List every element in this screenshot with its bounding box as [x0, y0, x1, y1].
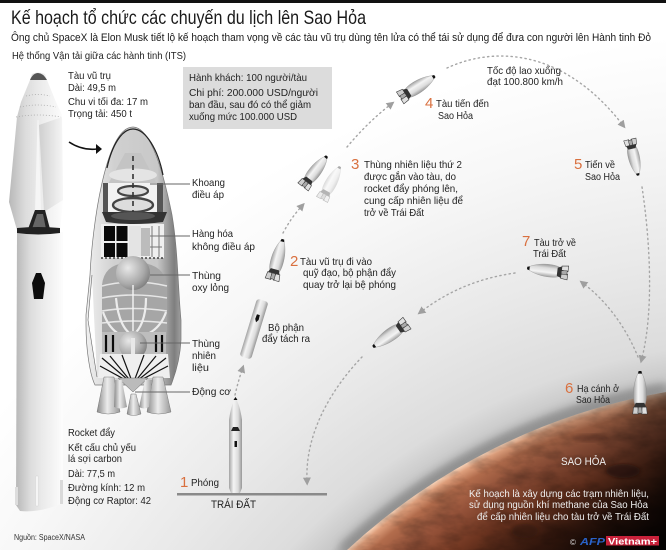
label: engine: Động cơ	[192, 386, 231, 398]
Mars note: sử dụng nguồn khí methane của Sao Hỏa	[469, 499, 648, 511]
step 3: được gắn vào tàu, do	[364, 170, 456, 183]
label: pressurized cabin: Khoang	[192, 177, 225, 189]
credit logos: AFP	[579, 537, 605, 548]
step 7: Trái Đất	[533, 248, 566, 260]
label: unpressurized cargo: không điều áp	[192, 241, 255, 253]
credit logos: ©	[570, 538, 576, 547]
liquid oxygen tank	[102, 256, 167, 345]
speed note	[487, 65, 563, 88]
step 3	[351, 156, 463, 219]
booster label: lá sợi carbon	[68, 453, 122, 465]
ship 3	[298, 152, 332, 191]
booster label: Động cơ Raptor: 42	[68, 495, 151, 507]
label: fuel tank	[192, 338, 220, 374]
step 4: Sao Hỏa	[438, 110, 473, 122]
separated booster	[239, 299, 269, 359]
step 2: 2	[290, 253, 298, 270]
label: Mars: SAO HỎA	[561, 455, 607, 468]
step 3: rocket đẩy phóng lên,	[364, 183, 458, 195]
pressurized cabin	[102, 153, 167, 224]
step 6: Sao Hỏa	[576, 394, 610, 406]
panel: passengers and cost: xuống mức 100.000 USD	[189, 111, 297, 123]
spaceship label	[68, 70, 148, 120]
engines	[97, 377, 171, 416]
ship returning	[369, 317, 411, 353]
step 5: 5	[574, 156, 582, 173]
panel: passengers and cost	[183, 67, 332, 129]
label: liquid oxygen tank: oxy lỏng	[192, 282, 229, 294]
step 2: Tàu vũ trụ đi vào	[300, 256, 372, 268]
planet shadow halo	[342, 388, 666, 550]
booster label: Đường kính: 12 m	[68, 482, 145, 494]
step 6	[565, 380, 619, 406]
center highlight and shaded panel	[35, 117, 63, 212]
source: Nguồn: SpaceX/NASA	[14, 533, 86, 542]
booster lower fins	[15, 476, 63, 506]
top black bar	[0, 0, 666, 3]
step 4: 4	[425, 95, 433, 112]
step 2	[290, 253, 397, 291]
step 2: quỹ đạo, bộ phận đẩy	[303, 267, 397, 279]
label: liquid oxygen tank: Thùng	[192, 270, 221, 282]
step 3: trở về Trái Đất	[364, 207, 424, 219]
section heading: Hệ thống Vận tải giữa các hành tinh (ITS)	[12, 50, 186, 62]
panel: passengers and cost: ban đầu, sau đó có thể giảm	[189, 99, 311, 111]
leader lines	[135, 184, 190, 392]
step 6: Hạ cánh ở	[577, 383, 619, 395]
panel: passengers and cost: Hành khách: 100 người/tàu	[189, 72, 307, 84]
step 5: Tiến về	[585, 159, 615, 171]
label: liquid oxygen tank	[192, 270, 229, 294]
nose tip	[30, 73, 47, 80]
label: fuel tank: Thùng	[192, 338, 220, 350]
rocket booster body	[16, 232, 63, 511]
spaceship section	[9, 72, 63, 230]
fuel tank section	[102, 331, 166, 359]
planet: Mars	[347, 392, 666, 550]
label: fuel tank: liệu	[192, 362, 209, 374]
step 7: 7	[522, 233, 530, 250]
step 1	[180, 474, 219, 491]
label: booster separation: đẩy tách ra	[262, 333, 310, 345]
credit logos	[570, 536, 659, 548]
spaceship label: Tàu vũ trụ	[68, 70, 111, 82]
engine struts	[98, 354, 170, 392]
step 3: 3	[351, 156, 359, 173]
ship 5	[624, 138, 644, 177]
cargo bay	[101, 224, 164, 258]
label: unpressurized cargo	[192, 228, 255, 253]
title: Kế hoạch tổ chức các chuyến du lịch lên Sao Hỏa	[11, 7, 366, 29]
Mars note	[469, 488, 649, 523]
black fin	[32, 273, 45, 299]
ship 4	[396, 70, 439, 104]
step 3: cung cấp nhiên liệu để	[364, 195, 463, 207]
ship 3 tanker faded	[316, 163, 346, 203]
flight path arrows	[235, 56, 650, 480]
hull	[86, 127, 181, 385]
spaceship label: Dài: 49,5 m	[68, 82, 116, 94]
ship 2	[265, 237, 290, 282]
dark fin collar	[17, 210, 60, 234]
label: unpressurized cargo: Hàng hóa	[192, 228, 233, 240]
Mars note: để cấp nhiên liệu cho tàu trở về Trái Đất	[477, 511, 649, 523]
credit logos: Vietnam+	[608, 536, 658, 547]
step 3: Thùng nhiên liệu thứ 2	[364, 159, 462, 171]
label: earth: TRÁI ĐẤT	[211, 498, 256, 511]
booster label: Kết cấu chủ yếu	[68, 442, 136, 454]
step 1: 1	[180, 474, 188, 491]
step 5	[574, 156, 620, 183]
panel: passengers and cost: Chi phí: 200.000 USD/người	[189, 87, 318, 99]
speed note: Tốc độ lao xuống	[487, 65, 561, 77]
booster label: Dài: 77,5 m	[68, 468, 115, 480]
curved black arrow	[69, 142, 102, 154]
speed note: đạt 100.800 km/h	[487, 76, 563, 88]
launch rocket	[229, 397, 242, 493]
step 6: 6	[565, 380, 573, 397]
label: booster separation	[262, 322, 310, 345]
booster label	[68, 427, 151, 507]
step 7	[522, 233, 576, 260]
label: pressurized cabin: điều áp	[192, 189, 224, 201]
step 2: quay trở lại bệ phóng	[303, 279, 396, 291]
booster label: Rocket đẩy	[68, 427, 116, 439]
step 4	[425, 95, 489, 122]
launch pad ground	[177, 493, 327, 496]
step 7: Tàu trở về	[534, 237, 576, 249]
step 4: Tàu tiến đến	[436, 98, 489, 110]
Mars note: Kế hoạch là xây dựng các trạm nhiên liệu,	[469, 488, 649, 500]
label: pressurized cabin	[192, 177, 225, 201]
spaceship label: Trọng tải: 450 t	[68, 108, 132, 120]
cutaway diagram of spaceship	[86, 127, 181, 416]
ship 6 landed	[633, 371, 647, 414]
full rocket illustration	[9, 72, 63, 511]
spaceship label: Chu vi tối đa: 17 m	[68, 96, 148, 108]
label: booster separation: Bộ phận	[268, 322, 304, 334]
step 5: Sao Hỏa	[585, 171, 620, 183]
ship 7	[526, 261, 569, 280]
step 1: Phóng	[191, 477, 219, 489]
label: fuel tank: nhiên	[192, 350, 216, 362]
